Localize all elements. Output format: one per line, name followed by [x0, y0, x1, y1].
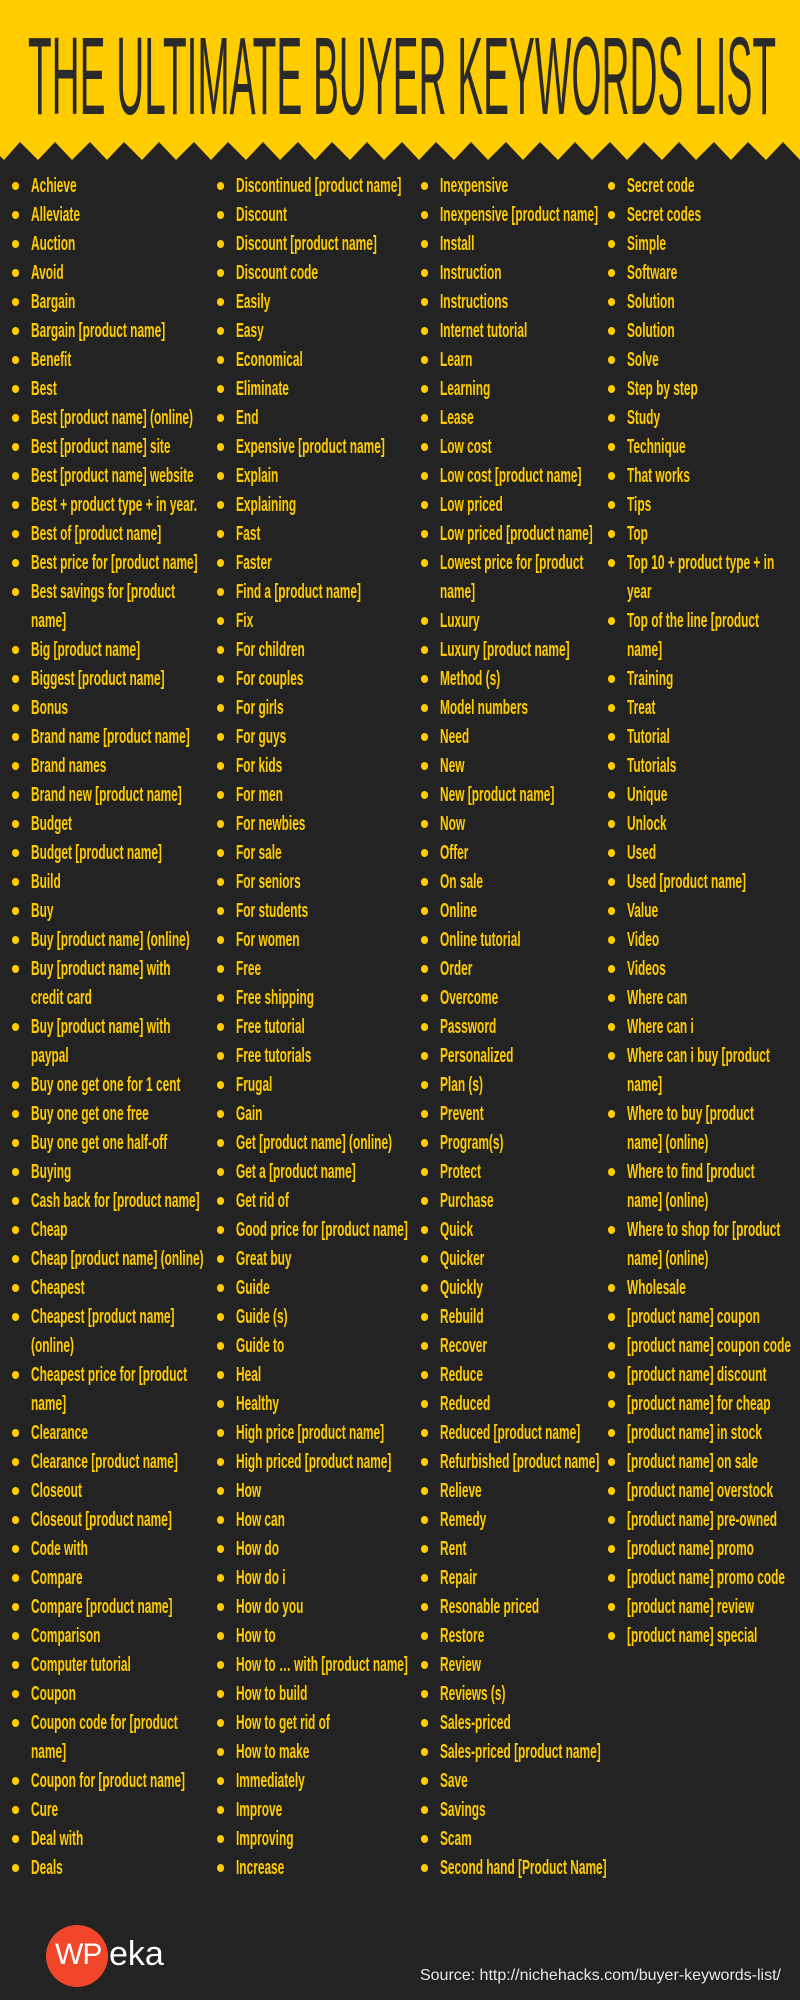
column 1 list: Computer tutorial	[31, 1654, 131, 1676]
column 1 list: Deals	[31, 1857, 63, 1879]
zigzag edge	[0, 142, 800, 160]
column 2 list: How can	[236, 1509, 285, 1531]
column 1 list: Cheap	[31, 1219, 67, 1241]
column 2 list: Discount	[236, 204, 287, 226]
column 3 list: Lease	[440, 407, 474, 429]
column 4 list: Value	[627, 900, 658, 922]
column 3 list: Lowest price for [product	[440, 552, 583, 574]
column 2 list: How to	[236, 1625, 276, 1647]
column 2 list: Immediately	[236, 1770, 305, 1792]
column 4 list: Training	[627, 668, 673, 690]
column 3 list: Low cost	[440, 436, 492, 458]
column 3 list: New [product name]	[440, 784, 554, 806]
column 3 list: Save	[440, 1770, 468, 1792]
column 3 list: Scam	[440, 1828, 472, 1850]
column 2 list: Free shipping	[236, 987, 314, 1009]
column 4 list: Where to find [product	[627, 1161, 755, 1183]
column 3 list: Luxury [product name]	[440, 639, 570, 661]
column 1 list: Bargain	[31, 291, 75, 313]
column 3 list: Instructions	[440, 291, 508, 313]
column 3 list: Program(s)	[440, 1132, 503, 1154]
column 3 list: Quickly	[440, 1277, 483, 1299]
column 2 list: Get rid of	[236, 1190, 289, 1212]
column 3 list: Instruction	[440, 262, 501, 284]
column 4 list: name] (online)	[627, 1190, 708, 1212]
column 3 list: Plan (s)	[440, 1074, 483, 1096]
column 3 list: Order	[440, 958, 472, 980]
column 1 list: Buy one get one free	[31, 1103, 149, 1125]
column 4 list: Solution	[627, 320, 675, 342]
column 1 list: Clearance [product name]	[31, 1451, 178, 1473]
column 4 list: Study	[627, 407, 660, 429]
column 2 list: For couples	[236, 668, 303, 690]
column 2 list: Explaining	[236, 494, 296, 516]
column 1 list: Buy one get one half-off	[31, 1132, 167, 1154]
column 3 list: Luxury	[440, 610, 480, 632]
column 4 list: Where can	[627, 987, 687, 1009]
column 2 list: Explain	[236, 465, 278, 487]
column 1 list	[12, 175, 204, 1879]
column 3 list: Low priced	[440, 494, 503, 516]
column 3 list: Restore	[440, 1625, 484, 1647]
column 4 list: [product name] promo code	[627, 1567, 785, 1589]
column 2 list: Gain	[236, 1103, 262, 1125]
column 1 list: Bargain [product name]	[31, 320, 165, 342]
column 4 list: Video	[627, 929, 659, 951]
column 1 list: Budget [product name]	[31, 842, 162, 864]
column 1 list: Coupon for [product name]	[31, 1770, 185, 1792]
column 4 list: Step by step	[627, 378, 698, 400]
column 2 list: For kids	[236, 755, 282, 777]
column 2 list: Discount [product name]	[236, 233, 377, 255]
column 1 list: Comparison	[31, 1625, 100, 1647]
column 3 list: Password	[440, 1016, 496, 1038]
column 1 list: Coupon	[31, 1683, 76, 1705]
column 1 list: Cheapest [product name]	[31, 1306, 174, 1328]
column 1 list: Budget	[31, 813, 72, 835]
column 1 list: Auction	[31, 233, 75, 255]
column 3 list: Refurbished [product name]	[440, 1451, 599, 1473]
column 2 list: Economical	[236, 349, 303, 371]
column 3 list: Reduced	[440, 1393, 490, 1415]
column 4 list: Solve	[627, 349, 659, 371]
column 3 list: Reduced [product name]	[440, 1422, 580, 1444]
column 1 list: Deal with	[31, 1828, 83, 1850]
column 1 list: Bonus	[31, 697, 68, 719]
column 1 list: Achieve	[31, 175, 77, 197]
column 2 list: For girls	[236, 697, 284, 719]
column 1 list: Best + product type + in year.	[31, 494, 197, 516]
column 4 list: Where can i	[627, 1016, 694, 1038]
column 3 list: Rebuild	[440, 1306, 484, 1328]
column 4 list: Used [product name]	[627, 871, 746, 893]
column 3 list: Method (s)	[440, 668, 500, 690]
column 4 list: Secret codes	[627, 204, 701, 226]
column 3 list: Inexpensive	[440, 175, 508, 197]
column 1 list: Benefit	[31, 349, 71, 371]
column 1 list: Cheap [product name] (online)	[31, 1248, 204, 1270]
column 4 list: That works	[627, 465, 690, 487]
column 4 list: name] (online)	[627, 1248, 708, 1270]
column 2 list: Eliminate	[236, 378, 289, 400]
column 2 list: For seniors	[236, 871, 301, 893]
column 4 list: Wholesale	[627, 1277, 686, 1299]
column 2 list: Frugal	[236, 1074, 272, 1096]
column 4 list: Where to shop for [product	[627, 1219, 780, 1241]
column 2 list: Guide (s)	[236, 1306, 288, 1328]
source text: Source: http://nichehacks.com/buyer-keywords-list/	[420, 1967, 781, 1984]
column 4 list: Where to buy [product	[627, 1103, 754, 1125]
column 1 list: paypal	[31, 1045, 69, 1067]
column 3 list: Learning	[440, 378, 490, 400]
column 1 list: Cheapest	[31, 1277, 85, 1299]
column 4 list: Technique	[627, 436, 686, 458]
column 4 list: [product name] overstock	[627, 1480, 773, 1502]
column 2 list	[217, 175, 408, 1879]
column 3 list: Sales-priced	[440, 1712, 511, 1734]
column 2 list: Free tutorials	[236, 1045, 311, 1067]
column 1 list: Buy [product name] with	[31, 958, 170, 980]
column 2 list: For women	[236, 929, 299, 951]
column 3 list: name]	[440, 581, 475, 603]
column 3 list: Second hand [Product Name]	[440, 1857, 607, 1879]
column 1 list: name]	[31, 1741, 66, 1763]
column 2 list: How do i	[236, 1567, 286, 1589]
column 3 list: Repair	[440, 1567, 477, 1589]
column 4 list: [product name] in stock	[627, 1422, 762, 1444]
column 4 list: Software	[627, 262, 677, 284]
column 1 list: Avoid	[31, 262, 64, 284]
column 1 list: Brand name [product name]	[31, 726, 190, 748]
column 4 list	[608, 175, 791, 1647]
column 3 list: Resonable priced	[440, 1596, 539, 1618]
column 1 list: Best price for [product name]	[31, 552, 198, 574]
column 3 list: Sales-priced [product name]	[440, 1741, 601, 1763]
column 2 list: How to … with [product name]	[236, 1654, 408, 1676]
column 3 list: Quicker	[440, 1248, 484, 1270]
column 2 list: For newbies	[236, 813, 305, 835]
column 2 list: Easily	[236, 291, 270, 313]
column 1 list: Big [product name]	[31, 639, 140, 661]
column 1 list: (online)	[31, 1335, 74, 1357]
column 4 list: year	[627, 581, 651, 603]
column 4 list: name]	[627, 639, 662, 661]
column 2 list: Get a [product name]	[236, 1161, 356, 1183]
column 2 list: How to make	[236, 1741, 309, 1763]
column 1 list: Best [product name] site	[31, 436, 171, 458]
column 4 list: Videos	[627, 958, 666, 980]
column 2 list: Discontinued [product name]	[236, 175, 401, 197]
column 4 list: [product name] discount	[627, 1364, 766, 1386]
column 3 list: Model numbers	[440, 697, 528, 719]
column 1 list: Biggest [product name]	[31, 668, 165, 690]
column 3 list: Review	[440, 1654, 481, 1676]
column 3 list: Low cost [product name]	[440, 465, 581, 487]
column 1 list: Best of [product name]	[31, 523, 161, 545]
column 4 list: [product name] special	[627, 1625, 757, 1647]
column 1 list: name]	[31, 610, 66, 632]
column 3 list: Low priced [product name]	[440, 523, 593, 545]
column 2 list: How to build	[236, 1683, 307, 1705]
column 3 list: Savings	[440, 1799, 486, 1821]
column 2 list: High price [product name]	[236, 1422, 384, 1444]
column 1 list: Compare [product name]	[31, 1596, 172, 1618]
column 2 list: Free tutorial	[236, 1016, 305, 1038]
column 3 list: Install	[440, 233, 474, 255]
column 2 list: Get [product name] (online)	[236, 1132, 392, 1154]
column 3 list: Reviews (s)	[440, 1683, 505, 1705]
column 1 list: Closeout	[31, 1480, 82, 1502]
column 2 list: For men	[236, 784, 283, 806]
column 4 list: Tips	[627, 494, 651, 516]
column 4 list: Top 10 + product type + in	[627, 552, 774, 574]
column 2 list: Improve	[236, 1799, 282, 1821]
column 1 list: Coupon code for [product	[31, 1712, 178, 1734]
column 2 list: Expensive [product name]	[236, 436, 385, 458]
column 1 list: Cheapest price for [product	[31, 1364, 187, 1386]
column 2 list: Healthy	[236, 1393, 279, 1415]
column 3 list: Internet tutorial	[440, 320, 527, 342]
column 3 list: Need	[440, 726, 469, 748]
column 1 list: Code with	[31, 1538, 88, 1560]
column 3 list: Learn	[440, 349, 472, 371]
column 2 list: Good price for [product name]	[236, 1219, 408, 1241]
logo: WPeka: eka	[109, 1935, 164, 1973]
column 3 list: Protect	[440, 1161, 481, 1183]
column 3 list: Reduce	[440, 1364, 483, 1386]
column 2 list: Free	[236, 958, 261, 980]
column 1 list: Cure	[31, 1799, 58, 1821]
column 2 list: Faster	[236, 552, 272, 574]
column 2 list: For guys	[236, 726, 286, 748]
column 1 list: Buying	[31, 1161, 71, 1183]
column 1 list: credit card	[31, 987, 92, 1009]
column 4 list: [product name] review	[627, 1596, 754, 1618]
column 2 list: For sale	[236, 842, 282, 864]
column 2 list: How	[236, 1480, 261, 1502]
column 4 list: Tutorials	[627, 755, 676, 777]
column 2 list: Heal	[236, 1364, 261, 1386]
column 4 list: Unique	[627, 784, 667, 806]
column 3 list: Offer	[440, 842, 468, 864]
column 1 list: Brand names	[31, 755, 106, 777]
column 3 list: Prevent	[440, 1103, 484, 1125]
logo: WPeka: WP	[55, 1938, 101, 1971]
column 2 list: End	[236, 407, 258, 429]
column 1 list: Best [product name] (online)	[31, 407, 193, 429]
column 4 list: [product name] promo	[627, 1538, 754, 1560]
column 3 list: On sale	[440, 871, 483, 893]
column 2 list: How do you	[236, 1596, 303, 1618]
column 1 list: Best savings for [product	[31, 581, 175, 603]
column 1 list: Buy [product name] (online)	[31, 929, 190, 951]
column 1 list: Cash back for [product name]	[31, 1190, 200, 1212]
column 4 list: [product name] coupon code	[627, 1335, 791, 1357]
column 4 list: [product name] for cheap	[627, 1393, 770, 1415]
column 1 list: Build	[31, 871, 61, 893]
column 1 list: Clearance	[31, 1422, 88, 1444]
column 3 list: Rent	[440, 1538, 466, 1560]
column 4 list: [product name] coupon	[627, 1306, 760, 1328]
column 3 list: Online	[440, 900, 477, 922]
column 3 list: Overcome	[440, 987, 498, 1009]
column 2 list: Fix	[236, 610, 253, 632]
column 4 list: Where can i buy [product	[627, 1045, 770, 1067]
column 4 list: Solution	[627, 291, 675, 313]
column 2 list: Guide	[236, 1277, 270, 1299]
column 1 list: Closeout [product name]	[31, 1509, 172, 1531]
column 3 list: Relieve	[440, 1480, 482, 1502]
column 3 list: Now	[440, 813, 465, 835]
column 2 list: Guide to	[236, 1335, 284, 1357]
column 3 list	[421, 175, 607, 1879]
column 2 list: Great buy	[236, 1248, 292, 1270]
column 2 list: How do	[236, 1538, 279, 1560]
column 3 list: Quick	[440, 1219, 473, 1241]
column 2 list: How to get rid of	[236, 1712, 330, 1734]
column 2 list: Fast	[236, 523, 260, 545]
column 2 list: Find a [product name]	[236, 581, 361, 603]
column 3 list: Purchase	[440, 1190, 494, 1212]
column 3 list: Personalized	[440, 1045, 513, 1067]
column 1 list: Buy	[31, 900, 53, 922]
column 2 list: High priced [product name]	[236, 1451, 391, 1473]
column 2 list: Increase	[236, 1857, 284, 1879]
logo: WPeka	[46, 1925, 164, 1987]
column 3 list: Remedy	[440, 1509, 486, 1531]
column 4 list: Unlock	[627, 813, 667, 835]
column 1 list: Best	[31, 378, 57, 400]
column 4 list: Tutorial	[627, 726, 670, 748]
column 2 list: Easy	[236, 320, 264, 342]
column 1 list: Brand new [product name]	[31, 784, 182, 806]
column 1 list: Best [product name] website	[31, 465, 194, 487]
column 3 list: Online tutorial	[440, 929, 521, 951]
column 2 list: Discount code	[236, 262, 318, 284]
column 2 list: Improving	[236, 1828, 294, 1850]
column 4 list: name]	[627, 1074, 662, 1096]
column 1 list: Compare	[31, 1567, 83, 1589]
column 2 list: For children	[236, 639, 305, 661]
column 1 list: Buy [product name] with	[31, 1016, 170, 1038]
column 1 list: Alleviate	[31, 204, 80, 226]
column 4 list: [product name] pre-owned	[627, 1509, 777, 1531]
column 4 list: Secret code	[627, 175, 694, 197]
column 4 list: Top of the line [product	[627, 610, 759, 632]
column 1 list: Buy one get one for 1 cent	[31, 1074, 180, 1096]
column 1 list: name]	[31, 1393, 66, 1415]
header banner	[0, 0, 800, 160]
column 3 list: Inexpensive [product name]	[440, 204, 598, 226]
column 4 list: Top	[627, 523, 648, 545]
column 3 list: Recover	[440, 1335, 487, 1357]
column 4 list: Treat	[627, 697, 655, 719]
column 3 list: New	[440, 755, 464, 777]
column 4 list: [product name] on sale	[627, 1451, 758, 1473]
column 2 list: For students	[236, 900, 308, 922]
column 4 list: name] (online)	[627, 1132, 708, 1154]
column 4 list: Used	[627, 842, 656, 864]
column 4 list: Simple	[627, 233, 666, 255]
